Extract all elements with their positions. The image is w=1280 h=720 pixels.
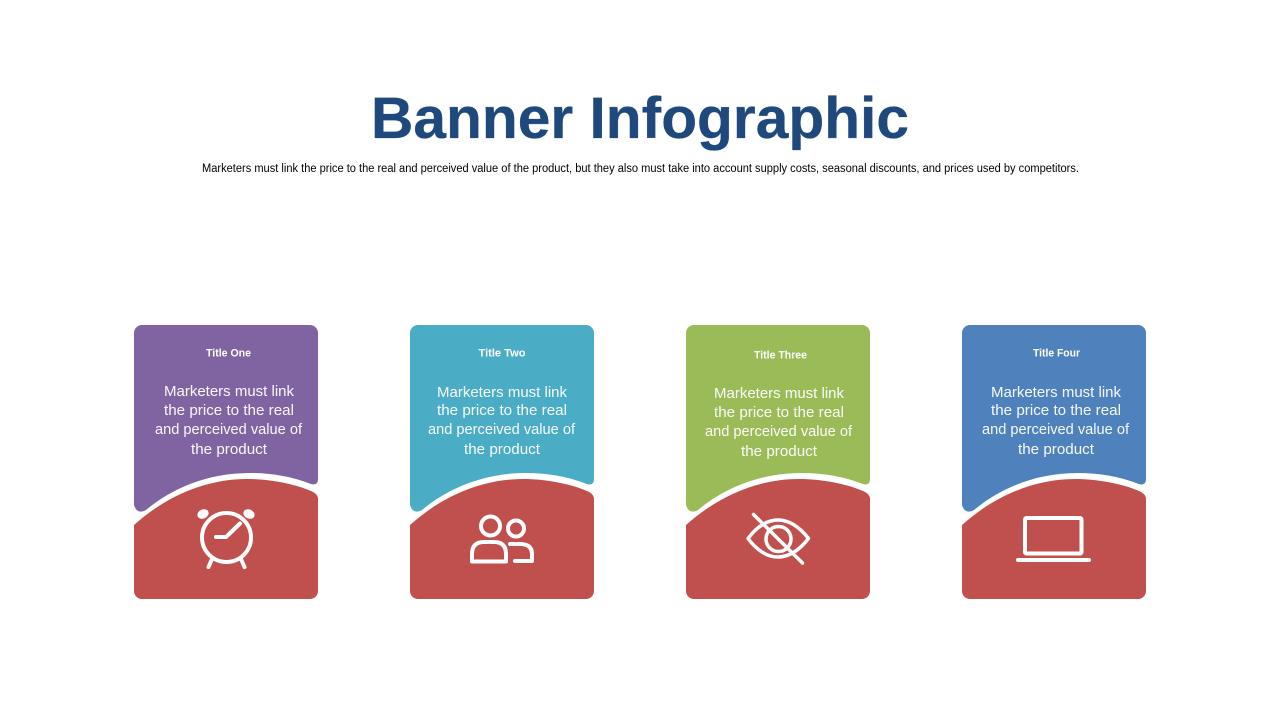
banner: blue (962, 325, 1146, 512)
heading: title one: Title One (206, 348, 251, 360)
icon: alarm clock (196, 507, 256, 567)
text block: card four (982, 384, 1130, 458)
text block: card three: the product (741, 443, 818, 460)
text block: card one: and perceived value of (155, 421, 303, 438)
text block: card two: the price to the real (437, 402, 567, 419)
text block: card one (155, 383, 303, 458)
icon: people (472, 516, 532, 562)
heading: title four: Title Four (1033, 348, 1081, 360)
text block: card two: Marketers must link (437, 384, 567, 401)
base: red (686, 479, 870, 599)
panel: card three (686, 325, 870, 599)
text block: card one: the price to the real (164, 402, 294, 419)
text block: card one: the product (191, 441, 268, 458)
banner: purple (134, 325, 318, 512)
title: Banner Infographic (371, 86, 909, 151)
panel: card four (962, 325, 1146, 599)
subtitle: Marketers must link the price to the real and perceived value of the product, but they also must take into account supply costs, seasonal discounts, and prices used by competitors. (202, 163, 1079, 175)
text block: card four: Marketers must link (991, 384, 1121, 401)
text block: card three (705, 385, 853, 460)
heading: title two: Title Two (478, 348, 526, 360)
text block: card four: the product (1018, 441, 1095, 458)
base: red (134, 479, 318, 599)
icon: laptop (1018, 518, 1089, 560)
text block: card four: the price to the real (991, 402, 1121, 419)
text block: card three: the price to the real (714, 404, 844, 421)
icon: crossed eye (748, 514, 808, 563)
banner: green (686, 325, 870, 512)
text block: card three: and perceived value of (705, 423, 853, 440)
heading: title three: Title Three (754, 350, 807, 362)
text block: card four: and perceived value of (982, 421, 1130, 438)
panel: card one (134, 325, 318, 599)
text block: card two: the product (464, 441, 541, 458)
text block: card two (428, 384, 576, 458)
panel: card two (410, 325, 594, 599)
text block: card three: Marketers must link (714, 385, 844, 402)
banner: teal (410, 325, 594, 512)
text block: card two: and perceived value of (428, 421, 576, 438)
base: red (962, 479, 1146, 599)
text block: card one: Marketers must link (164, 383, 294, 400)
base: red (410, 479, 594, 599)
